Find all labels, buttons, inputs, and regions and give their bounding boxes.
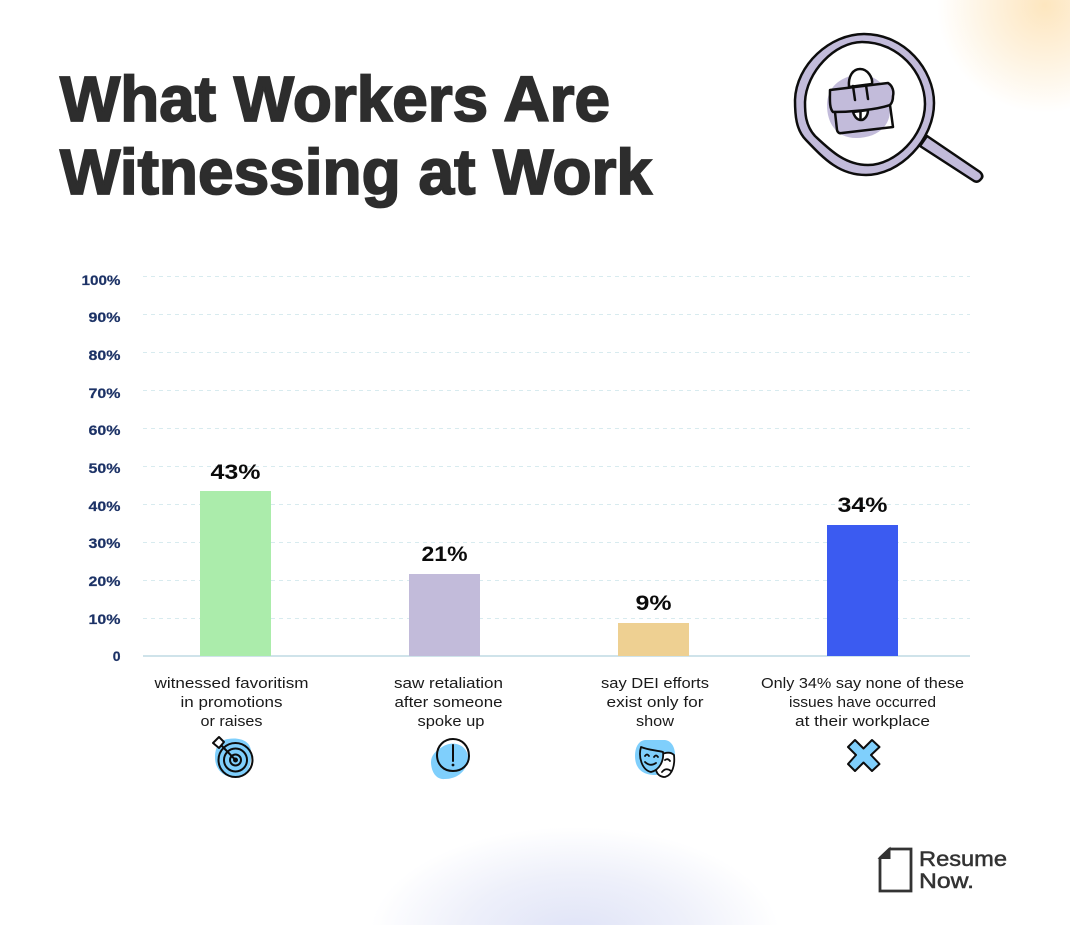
y axis labels: 10% bbox=[88, 611, 121, 627]
logo: Resume Now bbox=[880, 848, 1007, 893]
category labels: show bbox=[636, 713, 674, 730]
bar: retaliation 21% bbox=[409, 543, 480, 656]
bar: favoritism 43%: 43% bbox=[210, 461, 261, 484]
category labels: or raises bbox=[200, 713, 262, 730]
category labels: in promotions bbox=[180, 694, 282, 711]
bar: DEI 9% bbox=[618, 592, 689, 656]
category labels: saw retaliation bbox=[394, 675, 503, 692]
icon: magnifying glass with briefcase bbox=[795, 34, 982, 182]
icon: theatre masks bbox=[635, 740, 675, 777]
y axis labels: 50% bbox=[88, 460, 121, 476]
bar: favoritism 43% bbox=[200, 461, 271, 656]
title bbox=[60, 63, 652, 208]
title: What Workers Are bbox=[60, 63, 610, 135]
category labels: say DEI efforts bbox=[601, 675, 709, 692]
bar: none 34%: 34% bbox=[838, 494, 888, 517]
logo: Resume Now: Resume bbox=[919, 848, 1007, 871]
y axis labels bbox=[82, 272, 121, 664]
category labels: after someone bbox=[394, 694, 502, 711]
category labels: spoke up bbox=[418, 713, 484, 730]
y axis labels: 100% bbox=[82, 272, 121, 288]
y axis labels: 70% bbox=[88, 385, 121, 401]
bar: DEI 9%: 9% bbox=[636, 592, 672, 615]
category labels: witnessed favoritism bbox=[153, 675, 308, 692]
y axis labels: 30% bbox=[88, 535, 121, 551]
title: Witnessing at Work bbox=[60, 136, 652, 208]
category labels bbox=[153, 675, 964, 730]
chart: baseline bbox=[143, 655, 970, 657]
icon: exclamation bbox=[431, 739, 469, 779]
icon: cross bbox=[848, 740, 880, 771]
logo: Resume Now: Now. bbox=[919, 870, 974, 893]
bar: retaliation 21%: 21% bbox=[422, 543, 468, 566]
category labels: issues have occurred bbox=[789, 694, 936, 711]
chart: grid lines bbox=[143, 276, 970, 618]
y axis labels: 80% bbox=[88, 347, 121, 363]
bar: none 34% bbox=[827, 494, 898, 656]
y axis labels: 90% bbox=[88, 309, 121, 325]
category labels: exist only for bbox=[606, 694, 704, 711]
y axis labels: 40% bbox=[88, 498, 121, 514]
y axis labels: 60% bbox=[88, 422, 121, 438]
category labels: Only 34% say none of these bbox=[761, 675, 964, 692]
icon: target bbox=[213, 737, 252, 777]
category labels: at their workplace bbox=[795, 713, 930, 730]
y axis labels: 0 bbox=[113, 648, 121, 664]
y axis labels: 20% bbox=[88, 573, 121, 589]
